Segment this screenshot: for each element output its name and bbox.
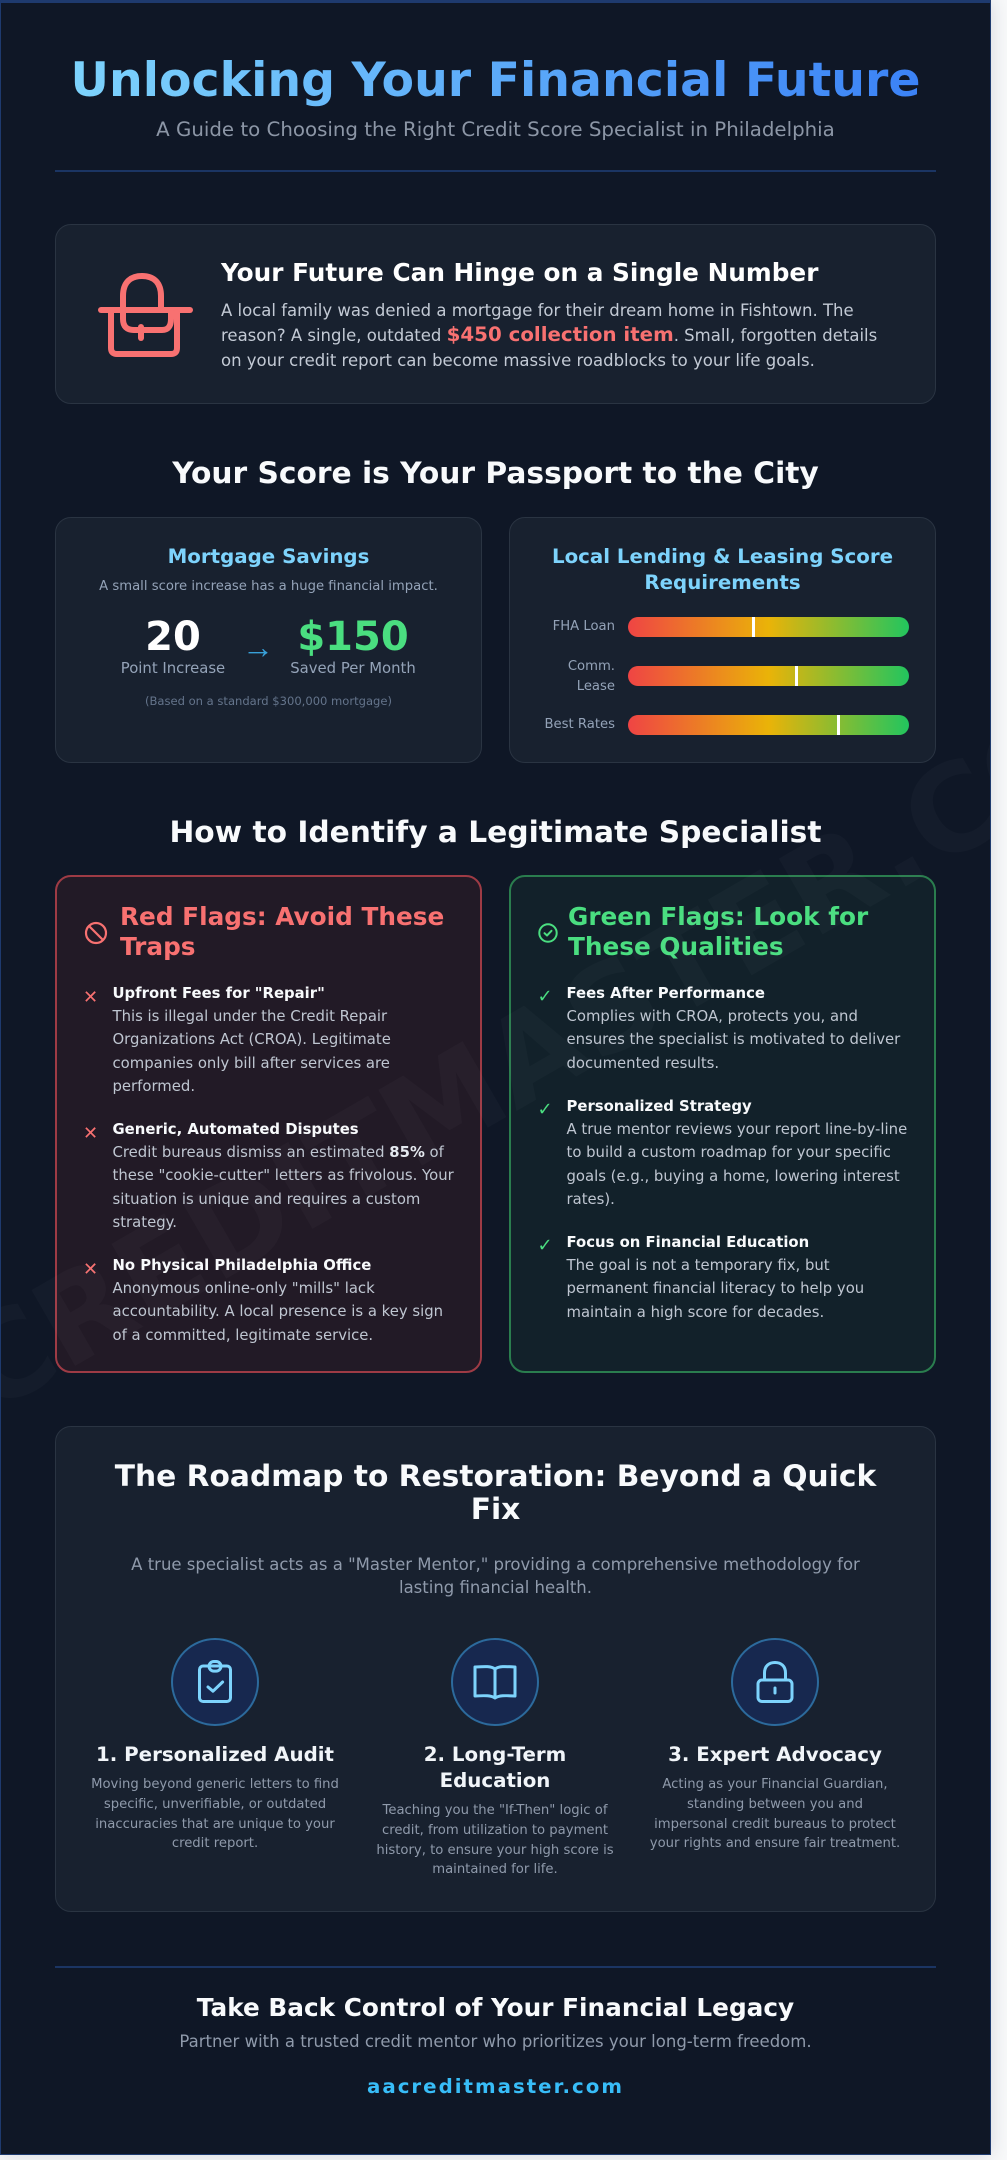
step 3: your rights and ensure fair treatment. bbox=[650, 1836, 900, 1851]
footer heading: Take Back Control of Your Financial Legacy bbox=[197, 1993, 794, 2022]
item: no office: accountability. A local presence is a key sign bbox=[112, 1302, 443, 1320]
item: no office: No Physical Philadelphia Office bbox=[112, 1256, 371, 1274]
item: personalized strategy bbox=[537, 1097, 907, 1208]
body text: on your credit report can become massive roadblocks to your life goals. bbox=[221, 350, 815, 370]
step 2: history, to ensure your high score is bbox=[376, 1843, 614, 1858]
card title: Mortgage Savings bbox=[168, 545, 369, 568]
panel: red flags bbox=[55, 875, 482, 1373]
roadmap intro: lasting financial health. bbox=[399, 1578, 592, 1596]
step 3: Acting as your Financial Guardian, bbox=[662, 1777, 888, 1792]
step 1: inaccuracies that are unique to your bbox=[95, 1817, 335, 1832]
item: personalized strategy: A true mentor reviews your report line-by-line bbox=[566, 1120, 907, 1138]
icon: clipboard check bbox=[171, 1638, 259, 1726]
item: financial education: The goal is not a temporary fix, but bbox=[566, 1256, 830, 1274]
stat: 150 dollars: $150 bbox=[297, 614, 409, 660]
icon: lock bbox=[731, 1638, 819, 1726]
step 3: 3. Expert Advocacy bbox=[668, 1742, 882, 1766]
item: fees after performance bbox=[537, 984, 900, 1072]
heading: passport: Your Score is Your Passport to the City bbox=[172, 456, 819, 491]
item: financial education: Focus on Financial Education bbox=[566, 1233, 809, 1251]
roadmap intro: A true specialist acts as a "Master Mentor," providing a comprehensive methodology for bbox=[131, 1554, 860, 1574]
panel: mortgage savings bbox=[55, 517, 482, 763]
step 3: impersonal credit bureaus to protect bbox=[654, 1817, 896, 1832]
step 2: credit, from utilization to payment bbox=[382, 1823, 608, 1838]
body text bbox=[221, 300, 877, 370]
icon: check circle bbox=[538, 923, 558, 943]
item: generic disputes bbox=[83, 1120, 454, 1231]
footer text: Partner with a trusted credit mentor who prioritizes your long-term freedom. bbox=[179, 2032, 812, 2051]
panel: roadmap bbox=[55, 1426, 936, 1912]
item: fees after performance: Complies with CROA, protects you, and bbox=[566, 1007, 858, 1025]
title: Unlocking Your Financial Future bbox=[71, 53, 920, 108]
arrow: → bbox=[242, 629, 274, 665]
item: generic disputes: Generic, Automated Disputes bbox=[112, 1120, 359, 1138]
body text: A local family was denied a mortgage for their dream home in Fishtown. The bbox=[221, 300, 854, 320]
step 1: 1. Personalized Audit bbox=[96, 1742, 334, 1766]
item: upfront fees: Organizations Act (CROA). Legitimate bbox=[112, 1030, 391, 1048]
item: upfront fees: Upfront Fees for "Repair" bbox=[112, 984, 325, 1002]
item: generic disputes: situation is unique and requires a custom bbox=[112, 1190, 420, 1208]
card title: Requirements bbox=[644, 571, 801, 594]
gauge: best rates bbox=[544, 715, 909, 735]
item: personalized strategy: Personalized Strategy bbox=[566, 1097, 752, 1115]
gauge: commercial lease bbox=[568, 659, 909, 694]
item: generic disputes: ✕ bbox=[83, 1123, 98, 1144]
item: no office: ✕ bbox=[83, 1259, 98, 1280]
step 1: Moving beyond generic letters to find bbox=[91, 1777, 339, 1792]
green heading: Green Flags: Look for bbox=[568, 902, 868, 931]
card subtitle: A small score increase has a huge financial impact. bbox=[99, 579, 438, 594]
step 2: Teaching you the "If-Then" logic of bbox=[383, 1803, 607, 1818]
item: upfront fees: This is illegal under the Credit Repair bbox=[112, 1007, 387, 1025]
step 3 bbox=[650, 1742, 900, 1851]
item: financial education: maintain a high score for decades. bbox=[566, 1303, 824, 1321]
stat: 20 points bbox=[121, 614, 225, 677]
step 1: credit report. bbox=[172, 1836, 258, 1851]
item: upfront fees: performed. bbox=[112, 1077, 195, 1095]
footnote: (Based on a standard $300,000 mortgage) bbox=[145, 694, 392, 708]
gauge: FHA loan bbox=[553, 617, 909, 637]
step 3: standing between you and bbox=[687, 1797, 863, 1812]
item: no office: Anonymous online-only "mills" lack bbox=[112, 1279, 375, 1297]
item: financial education: permanent financial literacy to help you bbox=[566, 1279, 864, 1297]
item: personalized strategy: rates). bbox=[566, 1190, 615, 1208]
panel: score requirements bbox=[509, 517, 936, 763]
item: upfront fees: companies only bill after services are bbox=[112, 1054, 390, 1072]
item: generic disputes: strategy. bbox=[112, 1213, 177, 1231]
item: no office bbox=[83, 1256, 443, 1344]
step 2: 2. Long-Term bbox=[424, 1742, 566, 1766]
item: fees after performance: ✓ bbox=[537, 986, 553, 1007]
heading: identify specialist: How to Identify a Legitimate Specialist bbox=[169, 815, 822, 850]
subtitle: A Guide to Choosing the Right Credit Score Specialist in Philadelphia bbox=[156, 118, 835, 141]
roadmap intro bbox=[131, 1554, 860, 1596]
panel: green flags bbox=[509, 875, 936, 1373]
body text: reason? A single, outdated $450 collection item. Small, forgotten details bbox=[221, 322, 877, 346]
red heading: Red Flags: Avoid These bbox=[120, 902, 444, 931]
heading: Your Future Can Hinge on a Single Number bbox=[221, 258, 818, 287]
gauge: best rates: Best Rates bbox=[544, 717, 615, 732]
step 1 bbox=[91, 1742, 339, 1851]
item: upfront fees bbox=[83, 984, 391, 1095]
step 2: Education bbox=[440, 1768, 550, 1792]
step 2: maintained for life. bbox=[432, 1862, 558, 1877]
item: fees after performance: ensures the specialist is motivated to deliver bbox=[566, 1030, 900, 1048]
item: generic disputes: these "cookie-cutter" letters as frivolous. Your bbox=[112, 1166, 454, 1184]
item: personalized strategy: to build a custom roadmap for your specific bbox=[566, 1143, 891, 1161]
roadmap heading: Fix bbox=[471, 1492, 520, 1527]
red heading: Traps bbox=[120, 932, 196, 961]
icon: bag bbox=[98, 273, 193, 357]
item: fees after performance: Fees After Performance bbox=[566, 984, 765, 1002]
icon: open book bbox=[451, 1638, 539, 1726]
footer link: aacreditmaster.com bbox=[367, 2075, 624, 2098]
item: personalized strategy: goals (e.g., buying a home, lowering interest bbox=[566, 1167, 900, 1185]
item: no office: of a committed, legitimate service. bbox=[112, 1326, 373, 1344]
red heading bbox=[120, 902, 444, 961]
stat: 20 points: Point Increase bbox=[121, 659, 225, 677]
item: fees after performance: documented results. bbox=[566, 1054, 719, 1072]
green heading: These Qualities bbox=[568, 932, 784, 961]
step 1: specific, unverifiable, or outdated bbox=[104, 1797, 326, 1812]
icon: prohibited bbox=[84, 922, 108, 944]
gauge: commercial lease: Lease bbox=[577, 679, 615, 694]
step 2 bbox=[376, 1742, 614, 1877]
item: financial education: ✓ bbox=[537, 1235, 553, 1256]
green heading bbox=[568, 902, 868, 961]
stat: 150 dollars bbox=[290, 614, 416, 677]
stat: 20 points: 20 bbox=[145, 614, 201, 660]
roadmap heading: The Roadmap to Restoration: Beyond a Quick bbox=[115, 1458, 876, 1494]
stat: 150 dollars: Saved Per Month bbox=[290, 659, 416, 677]
roadmap heading bbox=[114, 1458, 877, 1527]
item: financial education bbox=[537, 1233, 864, 1321]
card title bbox=[552, 545, 893, 594]
card title: Local Lending & Leasing Score bbox=[552, 545, 893, 568]
item: personalized strategy: ✓ bbox=[537, 1099, 553, 1120]
item: upfront fees: ✕ bbox=[83, 987, 98, 1008]
panel: hook story bbox=[55, 224, 936, 404]
item: generic disputes: Credit bureaus dismiss an estimated 85% of bbox=[112, 1143, 444, 1161]
gauge: FHA loan: FHA Loan bbox=[553, 619, 615, 634]
gauge: commercial lease: Comm. bbox=[568, 659, 615, 674]
